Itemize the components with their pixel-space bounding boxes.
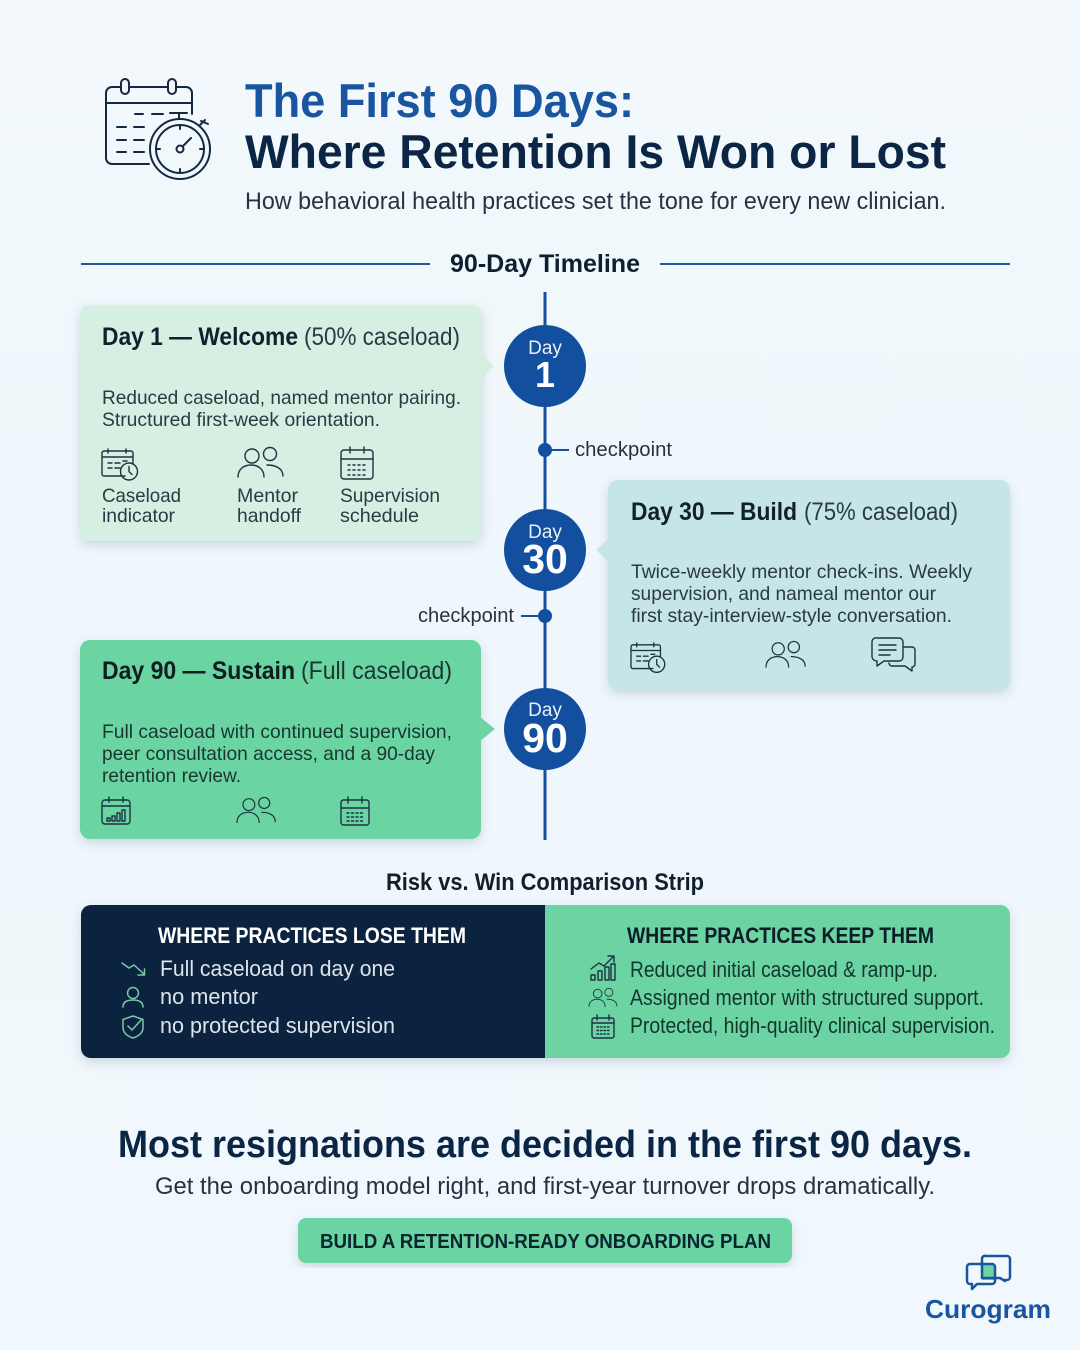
icon: review calendar — [341, 797, 369, 825]
logo: curogram: Curogram — [925, 1294, 1051, 1324]
marker: day 30: 30 — [522, 536, 568, 582]
panel: day 1 welcome — [80, 305, 494, 541]
card heading: (50% caseload) — [304, 323, 460, 351]
win list — [630, 957, 995, 1038]
card body: first stay-interview-style conversation. — [631, 605, 952, 627]
card heading — [102, 323, 460, 351]
icon: calendar clock — [631, 643, 665, 672]
checkpoint: after day 1: checkpoint — [575, 439, 672, 461]
card heading: Day 30 — Build — [631, 498, 797, 526]
icon: protected calendar — [592, 1015, 614, 1038]
title: The First 90 Days: — [245, 74, 634, 127]
card body: Twice-weekly mentor check-ins. Weekly — [631, 561, 972, 583]
icon: growth chart — [591, 956, 615, 980]
panel: day 90 sustain — [80, 640, 495, 839]
left column: where practices lose them — [122, 923, 466, 1038]
marker: day 90 — [504, 688, 586, 770]
icon labels: schedule — [340, 505, 419, 527]
icon labels — [102, 485, 440, 527]
closing headline: Most resignations are decided in the first 90 days. — [118, 1124, 972, 1166]
panel: day 30 build — [596, 480, 1010, 690]
icon: caseload indicator — [102, 449, 138, 480]
card body — [102, 721, 452, 787]
checkpoint: before day 90: checkpoint — [418, 605, 514, 627]
icon: calendar with bars — [102, 797, 130, 824]
icon labels: Supervision — [340, 485, 440, 507]
left column: where practices lose them: WHERE PRACTICES LOSE THEM — [158, 923, 466, 948]
icon: conversation bubbles — [872, 638, 915, 671]
icon: supervision schedule — [341, 447, 373, 479]
card body — [631, 561, 972, 627]
win list: Assigned mentor with structured support. — [630, 985, 984, 1010]
title — [245, 74, 946, 178]
marker: day 30 — [504, 509, 586, 591]
marker: day 90: 90 — [522, 715, 568, 761]
card body: Structured first-week orientation. — [102, 409, 380, 431]
icon: peers — [237, 797, 275, 822]
button: call to action: BUILD A RETENTION-READY ONBOARDING PLAN — [320, 1231, 771, 1253]
win list: Protected, high-quality clinical supervision. — [630, 1013, 995, 1038]
icon: person — [123, 988, 143, 1007]
card heading: Day 1 — Welcome — [102, 323, 298, 351]
icon: mentor pair — [766, 641, 805, 667]
marker: day 1 — [504, 325, 586, 407]
icon: shield check — [123, 1016, 143, 1038]
card body: Reduced caseload, named mentor pairing. — [102, 387, 461, 409]
card heading: (75% caseload) — [804, 498, 958, 526]
card body: supervision, and nameal mentor our — [631, 583, 936, 605]
right column: where practices keep them: WHERE PRACTICES KEEP THEM — [627, 923, 934, 948]
card body: retention review. — [102, 765, 241, 787]
icon: trend down — [122, 963, 144, 975]
panel: risk vs win strip — [81, 905, 1010, 1058]
section heading: 90-day timeline: 90-Day Timeline — [450, 250, 640, 278]
subtitle: How behavioral health practices set the tone for every new clinician. — [245, 188, 946, 215]
marker: day 90: Day — [528, 700, 562, 721]
icon labels: handoff — [237, 505, 302, 527]
logo: curogram — [925, 1256, 1051, 1324]
icon labels: Caseload — [102, 485, 181, 507]
timeline axis — [544, 292, 546, 840]
icon: mentor handoff — [238, 448, 283, 477]
right column: where practices keep them — [589, 923, 995, 1038]
icon: mentor group — [589, 988, 617, 1007]
risk list: Full caseload on day one — [160, 956, 395, 981]
risk list — [160, 956, 395, 1038]
card heading: Day 90 — Sustain — [102, 657, 295, 685]
icon labels: Mentor — [237, 485, 298, 507]
marker: day 30: Day — [528, 522, 562, 543]
win list: Reduced initial caseload & ramp-up. — [630, 957, 938, 982]
button: call to action — [298, 1218, 792, 1263]
title: Where Retention Is Won or Lost — [245, 125, 946, 178]
card body — [102, 387, 461, 431]
marker: day 1: Day — [528, 338, 562, 359]
risk list: no protected supervision — [160, 1013, 395, 1038]
icon: calendar with stopwatch — [106, 79, 210, 179]
marker: day 1: 1 — [535, 354, 555, 395]
card heading — [102, 657, 452, 685]
heading: comparison strip: Risk vs. Win Comparison Strip — [386, 869, 704, 896]
closing subhead: Get the onboarding model right, and first-year turnover drops dramatically. — [155, 1173, 935, 1200]
card heading: (Full caseload) — [301, 657, 452, 685]
card body: Full caseload with continued supervision, — [102, 721, 452, 743]
risk list: no mentor — [160, 984, 258, 1009]
card heading — [631, 498, 958, 526]
card body: peer consultation access, and a 90-day — [102, 743, 435, 765]
icon labels: indicator — [102, 505, 175, 527]
